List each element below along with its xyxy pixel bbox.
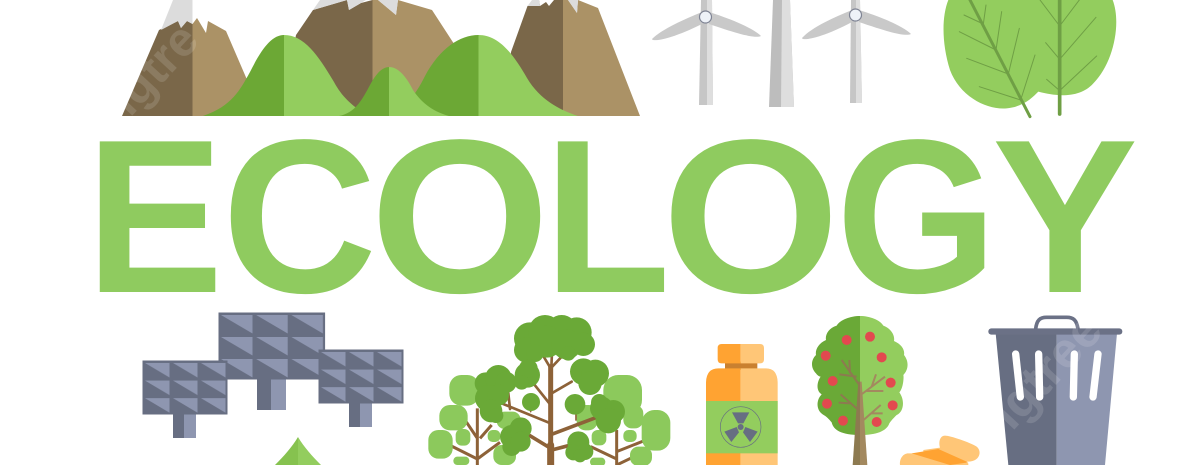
leaves	[944, 0, 1116, 117]
mountain: right	[505, 0, 640, 116]
title: ECOLOGY: O	[662, 94, 840, 339]
tree: main trunk and branches	[502, 352, 598, 465]
title: ECOLOGY: L	[544, 95, 670, 339]
apples	[821, 332, 898, 427]
bin body	[996, 333, 1057, 465]
hill: right	[380, 35, 578, 116]
leaf blades	[944, 0, 1116, 108]
tree: back right light canopy	[577, 375, 670, 465]
trash can	[988, 317, 1122, 465]
title: ECOLOGY: Y	[992, 95, 1138, 339]
apple tree	[812, 316, 908, 465]
title: ECOLOGY	[86, 94, 1138, 339]
bin rim	[988, 328, 1122, 335]
solar panel: right	[319, 350, 403, 427]
canopy	[812, 316, 860, 435]
canopy: lower	[500, 393, 593, 462]
tree: main dark canopy	[475, 315, 625, 462]
canopy: left	[475, 359, 540, 423]
orange capsule roll	[900, 436, 980, 465]
hill: left	[203, 35, 362, 116]
bin handle	[1036, 317, 1078, 329]
title: ECOLOGY: G	[836, 95, 997, 339]
trunk and branches	[853, 382, 860, 465]
turbine: left	[652, 0, 761, 105]
turbine: right	[802, 0, 911, 103]
canopy: right	[570, 358, 625, 433]
leaf veins: right	[1040, 0, 1097, 114]
mountains and green hills	[122, 0, 640, 116]
bottle body	[706, 368, 741, 465]
bottle label	[706, 401, 778, 453]
mountain: middle	[280, 0, 458, 116]
title: ECOLOGY: E	[86, 95, 223, 339]
leaf veins: left	[959, 0, 1035, 117]
mountain: left	[122, 0, 248, 116]
small green tree tip	[275, 437, 321, 465]
hill: small centre	[339, 67, 449, 116]
forest trees	[428, 315, 670, 465]
icon: radiation	[720, 407, 761, 447]
turbine: tower centre	[769, 0, 794, 107]
tree: back left light canopy	[428, 375, 521, 465]
title: ECOLOGY: C	[222, 94, 377, 338]
watermark: left: igtre	[99, 13, 209, 126]
canopy: top	[514, 315, 595, 363]
bin slots	[1016, 354, 1098, 397]
bottle with radiation symbol	[706, 344, 778, 465]
wind turbines	[652, 0, 911, 107]
watermark: right: igtree	[979, 302, 1113, 440]
bottle cap	[725, 362, 757, 370]
solar panel: left	[143, 361, 227, 438]
title: ECOLOGY: O	[370, 94, 550, 339]
solar panels	[143, 313, 403, 438]
solar panel: middle	[219, 313, 325, 410]
